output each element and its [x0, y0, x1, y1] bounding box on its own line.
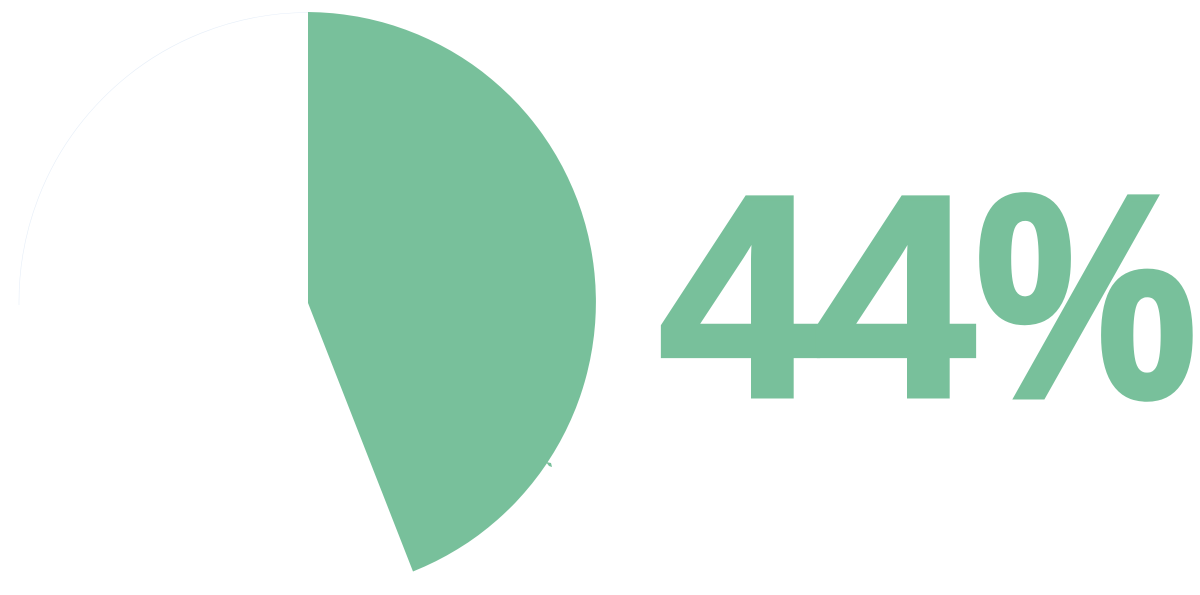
value label: 44%: %: [976, 135, 1196, 457]
small notch artifact on the slice edge: [546, 462, 552, 467]
value label: 44%: 4: [659, 136, 821, 458]
value label: 44%: [659, 135, 1196, 458]
pie chart: [19, 12, 596, 572]
value label: 44%: 4: [815, 136, 977, 458]
pie remainder outline: faint arc on the top-left quarter: [19, 12, 308, 305]
pie highlighted slice: green 44%: [308, 12, 596, 572]
